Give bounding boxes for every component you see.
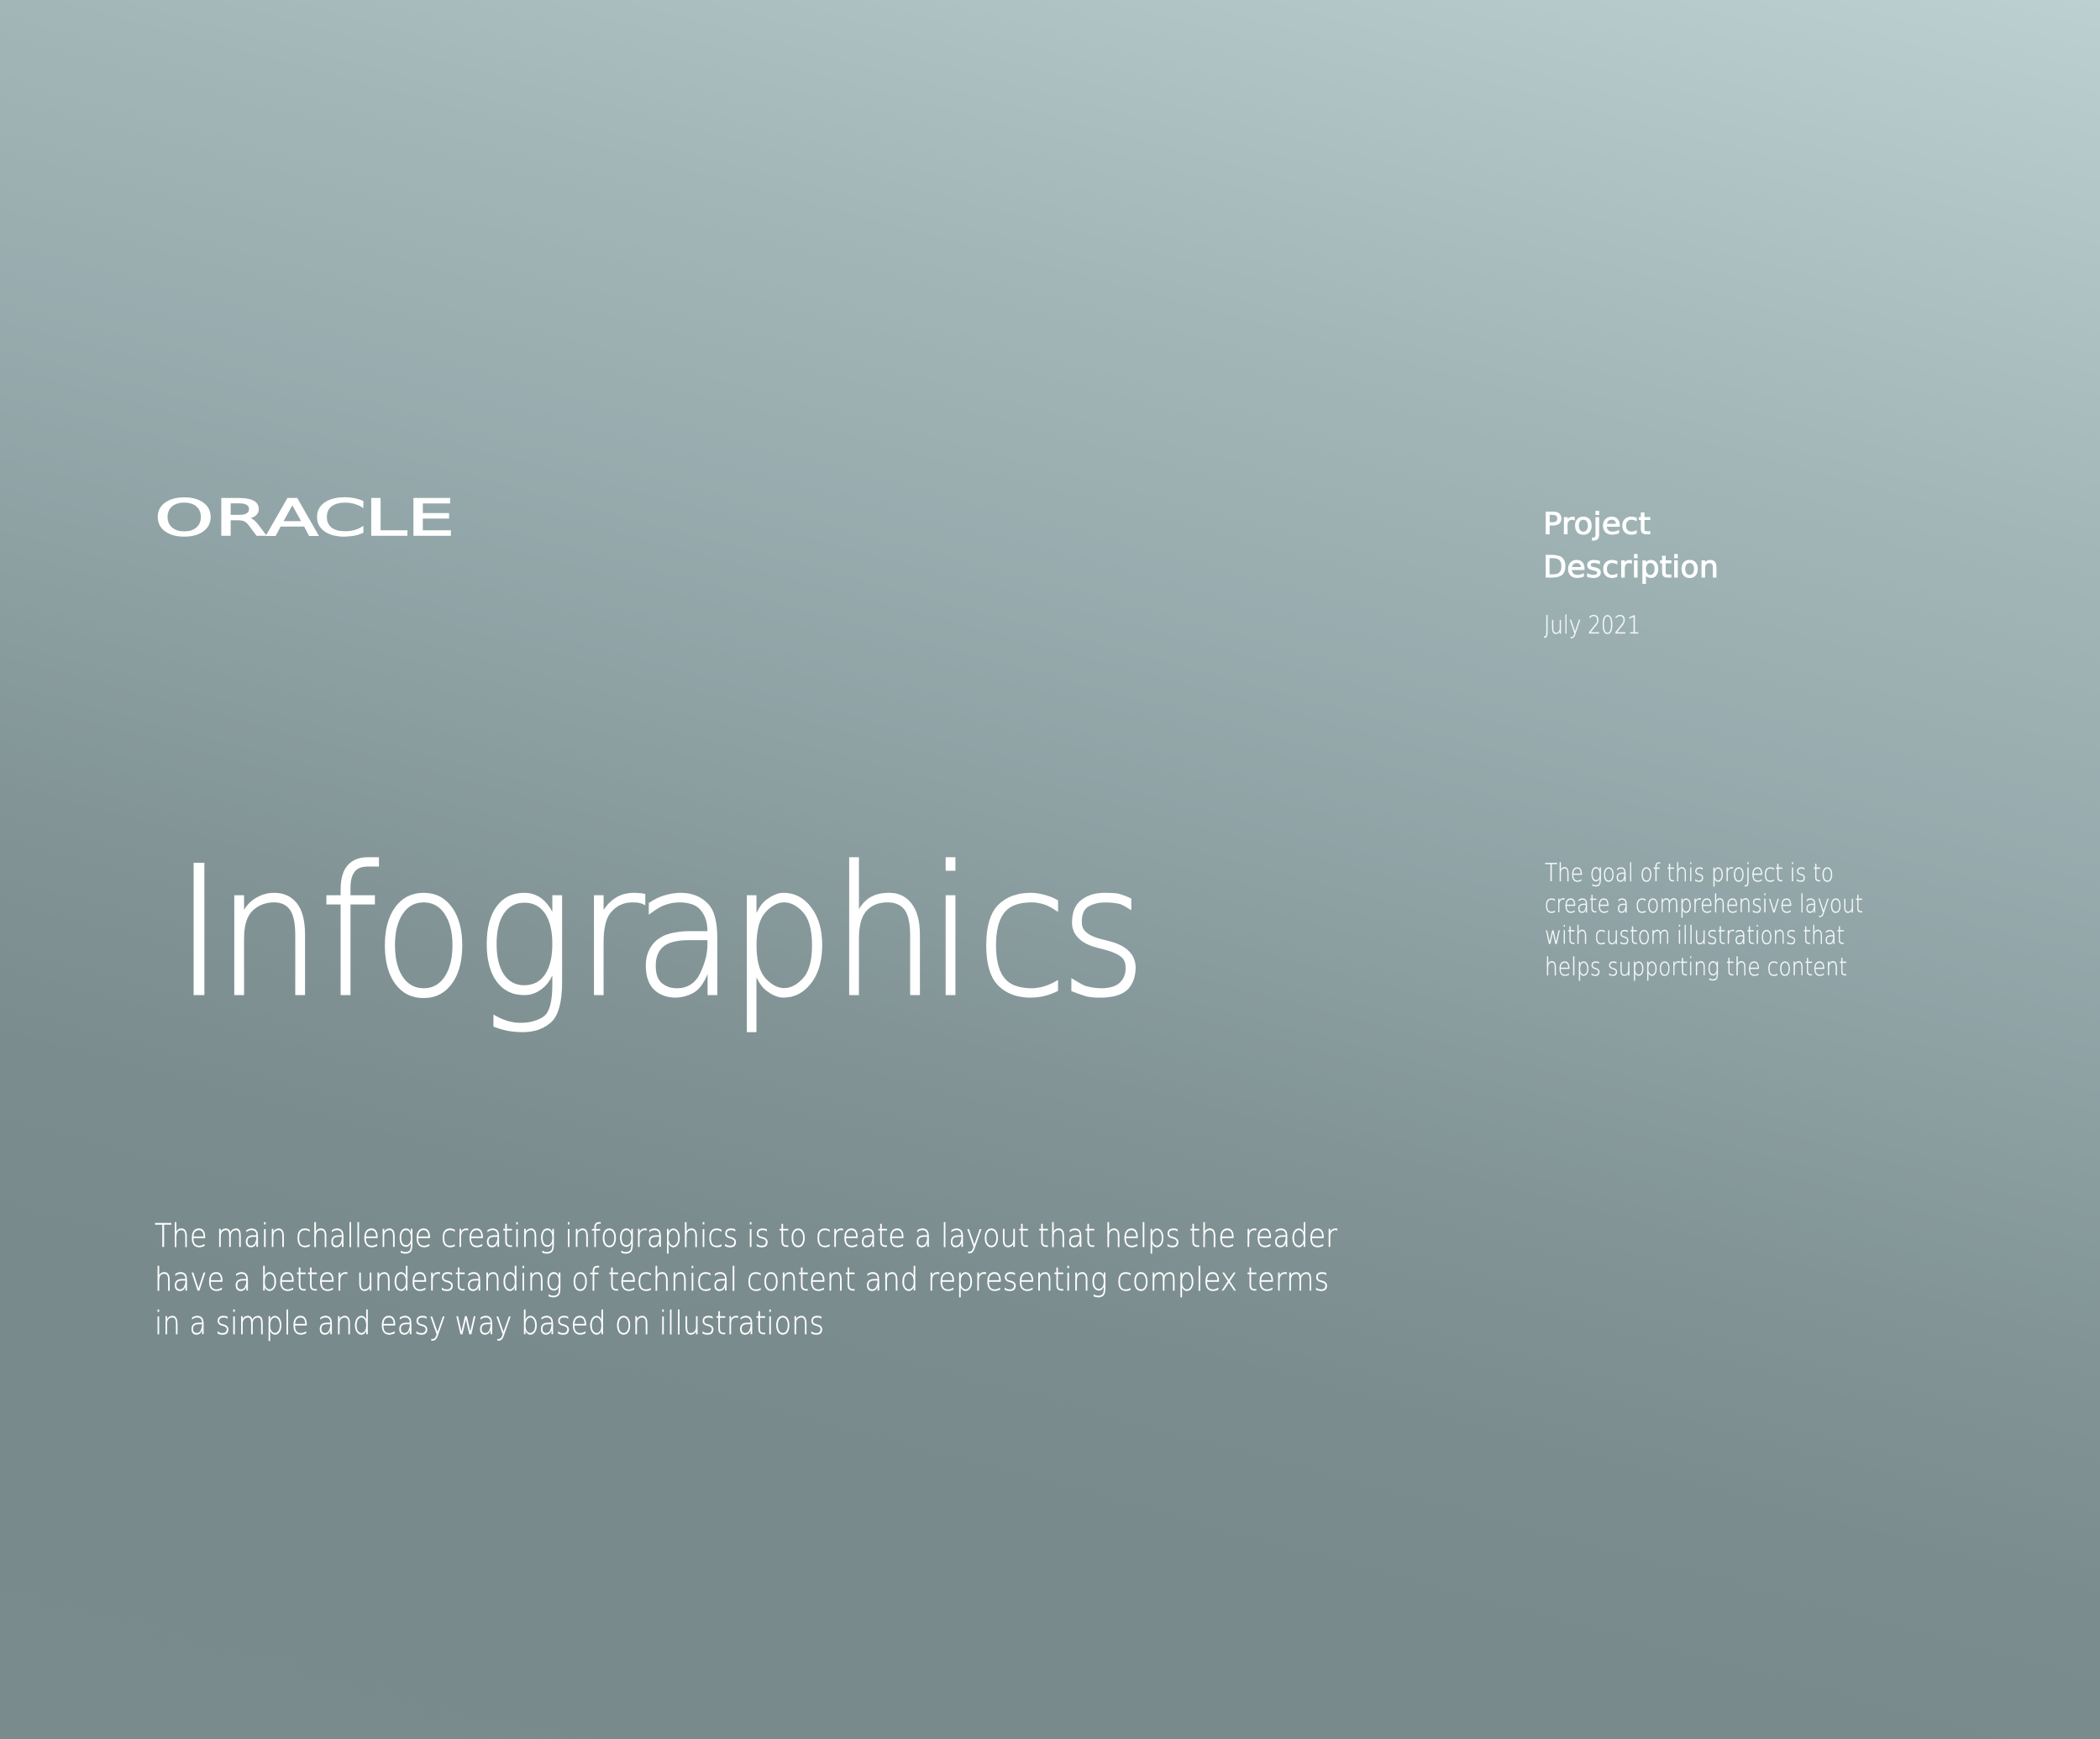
- heading: project description: Description: [1543, 550, 1719, 585]
- title: Infographics: [175, 829, 1147, 1037]
- text block: project goal: with custom illustrations that: [1545, 921, 1845, 949]
- text block: project goal: create a comprehensive layout: [1545, 890, 1863, 918]
- heading: project description: Project: [1543, 507, 1651, 541]
- logo: ORACLE wordmark: ORACLE: [155, 489, 454, 548]
- text block: main challenge intro: The main challenge creating infographics is to create a layout that helps the reader: [155, 1217, 1337, 1255]
- text block: project goal: The goal of this project is to: [1545, 859, 1834, 887]
- text block: main challenge intro: [155, 1217, 1337, 1342]
- text block: date: July 2021: [1544, 611, 1641, 639]
- heading: project description: [1543, 507, 1719, 585]
- text block: main challenge intro: in a simple and easy way based on illustrations: [155, 1305, 824, 1342]
- text block: project goal: [1545, 859, 1863, 981]
- text block: project goal: helps supporting the content: [1545, 953, 1847, 981]
- text block: main challenge intro: have a better understanding of technical content and representing complex terms: [155, 1261, 1329, 1299]
